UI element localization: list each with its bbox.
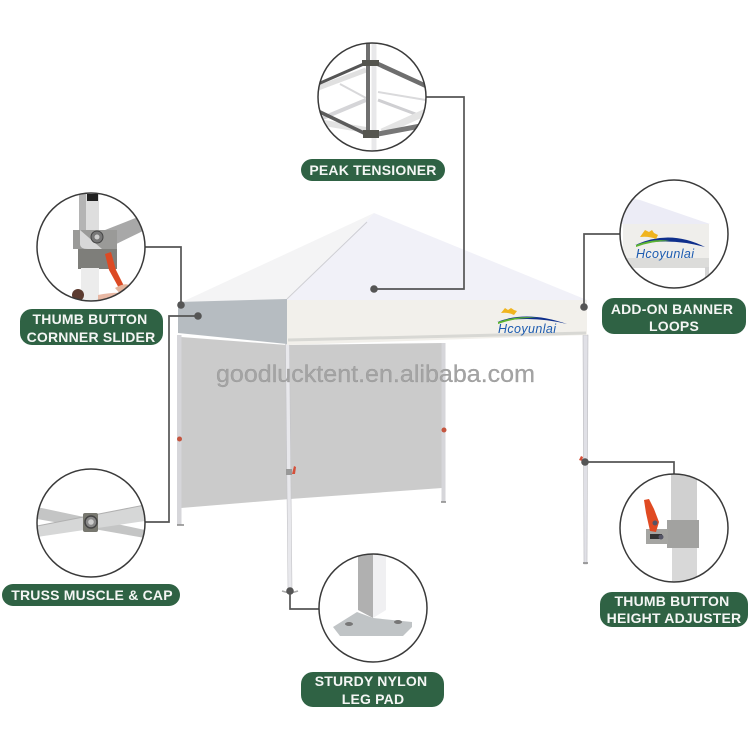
canopy roof [182,213,587,302]
left valance [178,299,287,344]
connector: banner loops [584,234,620,306]
label: thumb button height adjuster: HEIGHT ADJUSTER [607,610,741,626]
connector: corner slider [145,247,181,304]
side wall [181,337,443,508]
detail circle: thumb button corner slider [37,193,145,303]
valance logo [497,308,567,336]
label: thumb button corner slider [20,309,163,345]
label: sturdy nylon leg pad: STURDY NYLON [315,673,427,689]
canopy tent [177,213,588,592]
label: sturdy nylon leg pad [301,672,444,707]
label: peak tensioner [301,159,445,181]
label: truss muscle and cap [2,584,180,606]
connector: height adjuster [585,462,674,474]
connector: peak tensioner [374,97,464,289]
detail circle: sturdy nylon leg pad [319,554,427,662]
label: sturdy nylon leg pad: LEG PAD [342,691,404,707]
connector: truss muscle [145,316,198,522]
label: truss muscle and cap: TRUSS MUSCLE & CAP [11,587,173,603]
tent legs [177,335,588,592]
label: add-on banner loops: LOOPS [649,318,699,334]
label: add-on banner loops [602,298,746,334]
watermark: goodlucktent.en.alibaba.com [216,361,535,388]
detail circle: thumb button height adjuster [620,474,728,587]
label: thumb button height adjuster [600,592,748,627]
detail circle: add-on banner loops: Hcoyunlai [636,247,695,261]
connector: leg pad [290,591,319,609]
anchor dots [177,285,589,595]
label: thumb button corner slider: THUMB BUTTON [33,311,147,327]
label: add-on banner loops: ADD-ON BANNER [611,301,733,317]
label: peak tensioner: PEAK TENSIONER [309,162,437,178]
front valance [287,300,587,345]
detail circle: add-on banner loops [620,180,728,288]
valance logo: Hcoyunlai [498,322,557,336]
label: thumb button height adjuster: THUMB BUTTON [615,593,729,609]
detail circle: truss muscle and cap [37,469,145,577]
detail circle: peak tensioner [318,43,426,151]
label: thumb button corner slider: CORNNER SLIDER [27,329,155,345]
